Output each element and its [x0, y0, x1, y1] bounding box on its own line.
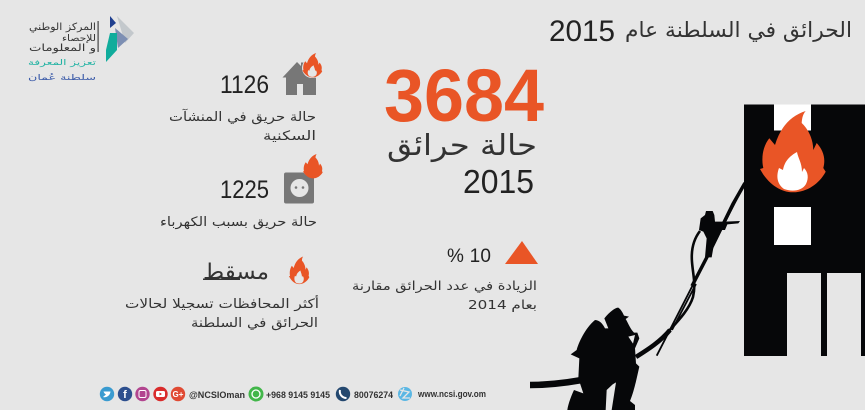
phone number: 80076274 — [354, 390, 393, 400]
firefighters with hose and ladder — [530, 183, 745, 410]
stat: electricity fires: حالة حريق بسبب الكهرباء — [160, 215, 317, 230]
logo text — [28, 21, 99, 82]
upper window — [774, 104, 811, 130]
stat: Muscat: أكثر المحافظات تسجيلا لحالات — [125, 295, 319, 312]
stat: residential fires — [169, 53, 322, 144]
logo — [28, 16, 134, 82]
title: الحرائق في السلطنة عام — [625, 18, 852, 42]
stat: residential fires: حالة حريق في المنشآت — [169, 108, 316, 125]
stat: residential fires: 1126 — [220, 71, 269, 99]
ladder — [657, 183, 745, 356]
icon: burning house — [282, 53, 322, 95]
stat: Muscat: مسقط — [203, 260, 269, 285]
logo mark — [106, 16, 134, 62]
icon: burning socket — [284, 154, 324, 204]
headline stat: 3684 fires — [384, 54, 544, 200]
whatsapp number: +968 9145 9145 — [266, 390, 330, 400]
icon: globe — [398, 387, 412, 401]
stat: Muscat — [125, 256, 319, 331]
icon: whatsapp — [248, 386, 264, 402]
icon: phone — [336, 387, 350, 401]
headline stat: 3684 fires: حالة حرائق — [387, 128, 537, 162]
footer contacts — [100, 386, 486, 402]
logo text: تعزيز المعرفة — [28, 58, 96, 67]
social glyphs: f — [123, 389, 127, 401]
icon: flame — [289, 256, 309, 284]
website: www.ncsi.gov.om — [417, 389, 486, 399]
icon: instagram — [135, 387, 150, 401]
hoses — [668, 231, 700, 332]
icon: google plus — [171, 387, 185, 401]
stat: Muscat: الحرائق في السلطنة — [191, 316, 318, 331]
icon: up triangle — [505, 241, 538, 264]
stat: 10% increase — [352, 241, 538, 312]
social glyphs — [103, 389, 184, 401]
stat: electricity fires: 1225 — [220, 176, 269, 204]
logo text: المركز الوطني — [29, 22, 96, 33]
stat: 10% increase: بعام 2014 — [468, 297, 537, 312]
logo text: سلطنة عُمان — [28, 73, 96, 82]
logo text: و المعلومات — [29, 43, 96, 54]
icon: facebook — [118, 387, 132, 401]
title — [549, 15, 852, 48]
large flame — [760, 111, 826, 192]
stat: 10% increase: الزيادة في عدد الحرائق مقارنة — [352, 278, 537, 294]
building — [744, 104, 865, 356]
handle: @NCSIOman — [189, 390, 245, 400]
social glyphs: G+ — [173, 390, 184, 399]
logo text: للإحصاء — [62, 34, 96, 44]
stat: electricity fires — [160, 154, 324, 230]
upper firefighter — [699, 211, 740, 257]
building on fire — [744, 104, 865, 356]
stat: 10% increase: % 10 — [447, 246, 491, 267]
headline stat: 3684 fires: 3684 — [384, 54, 544, 137]
title: 2015 — [549, 15, 615, 48]
headline stat: 3684 fires: 2015 — [463, 163, 534, 200]
icon: twitter — [100, 387, 114, 401]
lower firefighters — [567, 308, 639, 410]
lower window — [774, 207, 811, 245]
icon: youtube — [153, 387, 168, 401]
stat: residential fires: السكنية — [263, 129, 316, 144]
